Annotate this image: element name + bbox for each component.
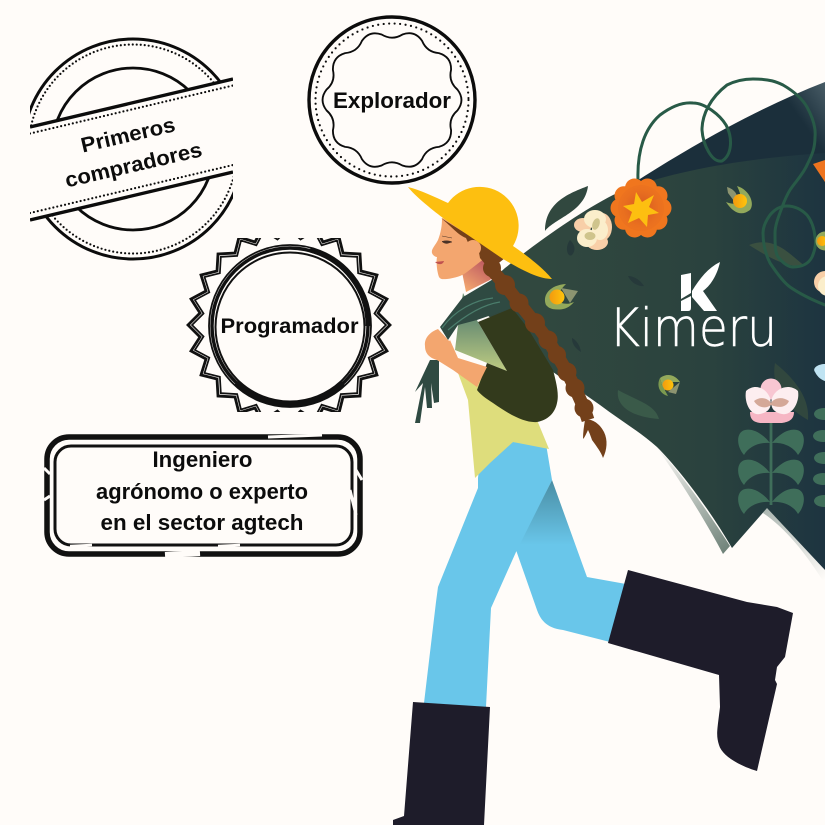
face: [432, 218, 482, 280]
label: line 2: agrónomo o experto: [96, 479, 308, 504]
cape shadow right: [763, 508, 824, 573]
label: line 1: Ingeniero: [152, 447, 252, 472]
backpack: [477, 308, 558, 422]
arm: [437, 340, 487, 387]
stamp: Primeros compradores: [23, 39, 243, 259]
blue petal at right edge: [814, 364, 825, 381]
hat: [408, 187, 552, 279]
vine: [638, 79, 825, 305]
stamp: Programador: [186, 238, 392, 412]
shirt upper gradient: [455, 293, 507, 371]
cape shadow left: [661, 453, 730, 554]
front trouser leg: [424, 442, 552, 707]
bud right edge: [816, 232, 825, 250]
rear boot: [608, 570, 793, 771]
bud lower: [658, 375, 680, 396]
cape upper dark layer: [640, 82, 825, 181]
shawl: [415, 280, 500, 423]
plant: pink flower stem: [738, 378, 804, 514]
ear: [468, 240, 481, 253]
shirt: [458, 370, 549, 478]
logo: K icon: [681, 262, 720, 311]
hair: [441, 218, 504, 264]
flower: cream: [574, 210, 612, 250]
leaf outside cape: [545, 186, 588, 231]
eye and brow: [442, 236, 452, 244]
bud near hat: [545, 284, 578, 310]
cape main body: [470, 153, 825, 570]
bud upper right: [726, 186, 752, 213]
rear trouser leg: [516, 480, 626, 642]
stamp: Explorador: [309, 17, 475, 183]
flower: cream at right edge: [814, 271, 825, 296]
label: line 3: en el sector agtech: [100, 510, 304, 535]
label: Programador: Programador: [220, 315, 358, 338]
braid: [483, 259, 607, 458]
faint leaves: [567, 240, 808, 420]
label: Primeros: Primeros: [79, 113, 177, 157]
lips: [435, 261, 444, 264]
neck: [462, 260, 491, 292]
orange triangle at edge: [813, 160, 825, 182]
logo: Kimeru wordmark: Kimeru: [609, 298, 777, 359]
front boot: [393, 702, 490, 825]
hand: [425, 329, 451, 360]
plant: right edge stem: [813, 408, 825, 507]
stamp: Ingeniero agrónomo o experto en el sector agtech: [44, 435, 362, 555]
flower: orange: [610, 178, 672, 238]
label: Explorador: Explorador: [333, 88, 451, 113]
cape: [393, 79, 825, 825]
label: compradores: compradores: [63, 138, 204, 192]
